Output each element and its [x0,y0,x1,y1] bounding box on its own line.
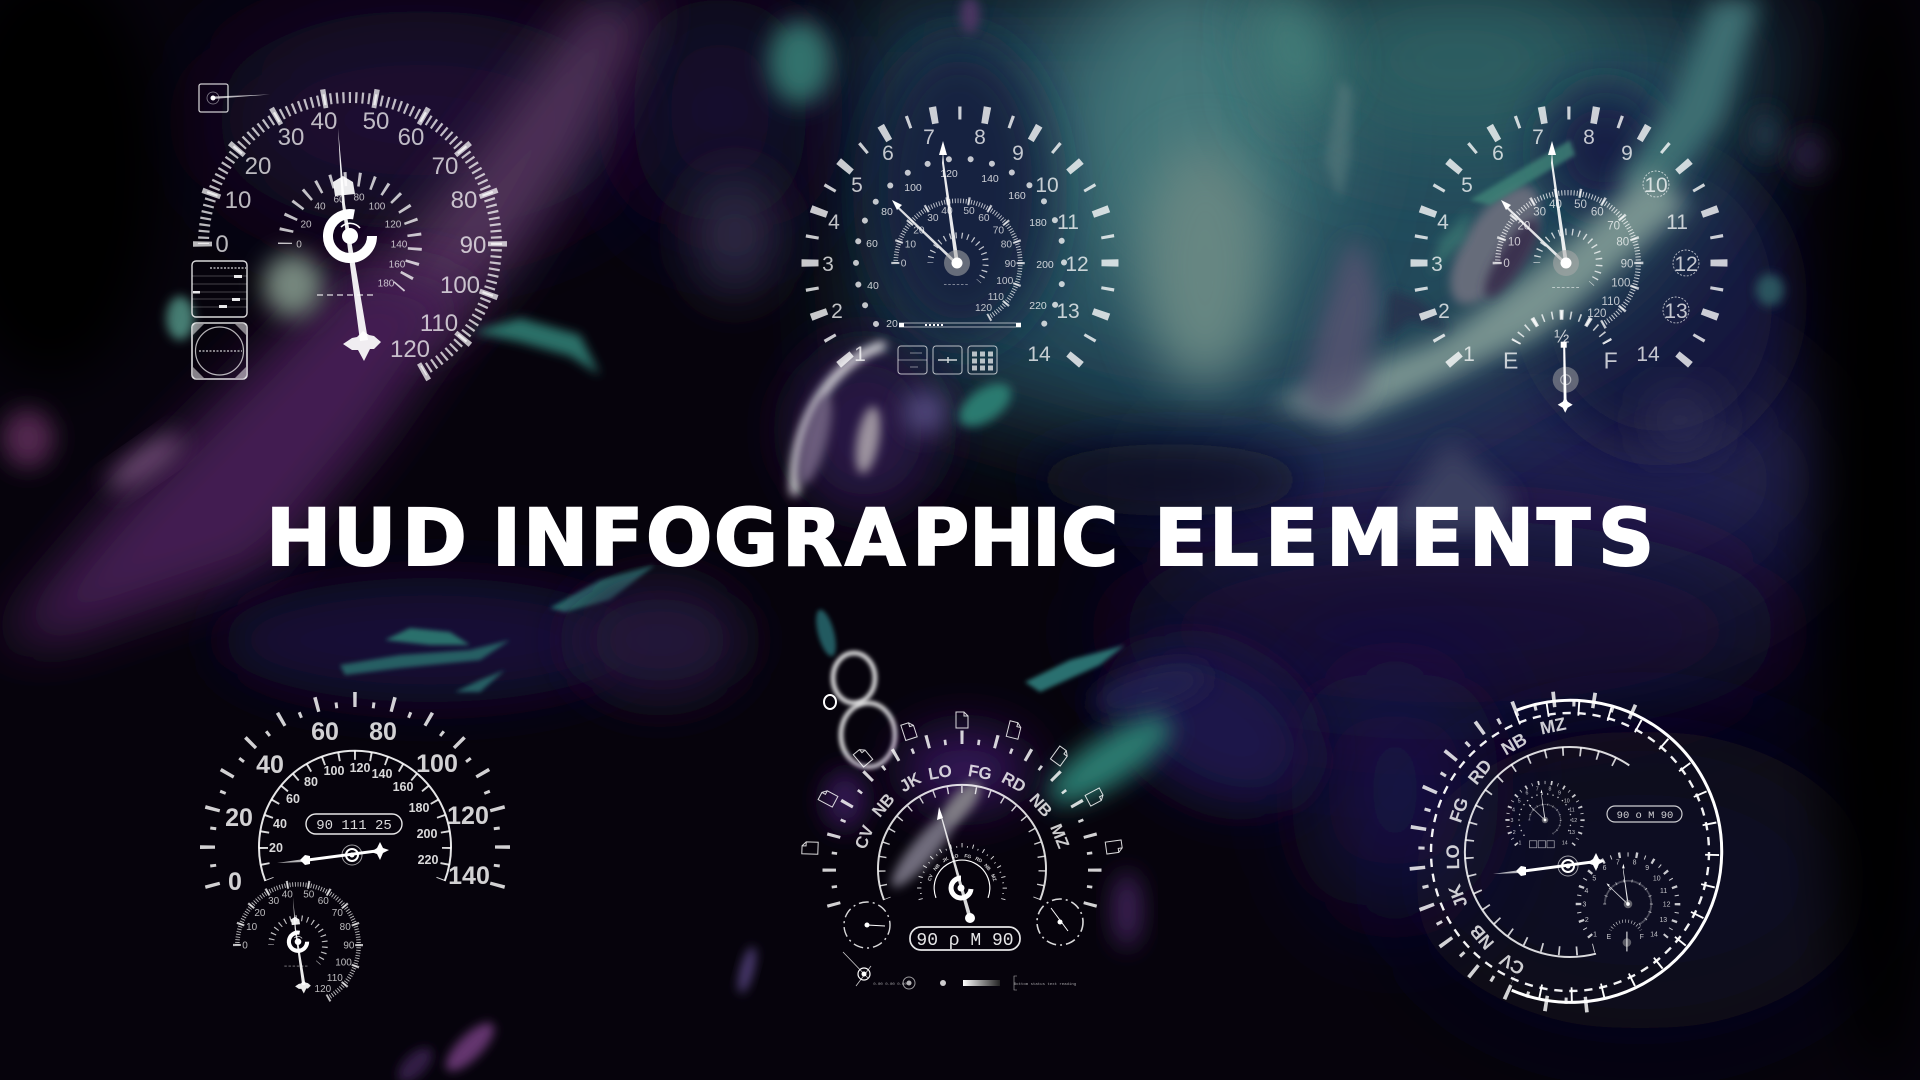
dotted ring labels: 180 [1029,217,1047,229]
dotted ring [856,159,1064,324]
inner mini speedometer: 10 [905,240,916,251]
mini speedometer [237,884,359,998]
mini speedometer: 100 [335,957,352,968]
tach number labels: 5 [1461,174,1473,197]
inner labels: 160 [393,780,413,794]
inner mini speedometer: 30 [927,213,939,224]
outer ring [1512,700,1722,1002]
title: HUD INFOGRAPHIC ELEMENTS [266,494,1654,584]
inner mini speedometer: 30 [1533,206,1546,218]
rotated zone labels: LO [1443,844,1463,870]
inner arc [878,785,1046,900]
mini speedometer: 50 [303,889,315,900]
inner scale labels: 0 [296,240,302,250]
mini speedometer: 20 [254,908,266,919]
tach number labels: 13 [1056,300,1080,323]
inner labels: 200 [417,827,437,841]
mini tach gauge: 14 [1562,840,1568,846]
mini tach gauge: 4 [1512,808,1515,814]
inner labels: 60 [286,792,300,806]
dotted ring labels: 200 [1036,259,1054,271]
readout pill [306,814,402,834]
outer bold labels: 60 [311,718,339,746]
tach number labels: 12 [1065,253,1089,276]
mini zone dial: CV [927,873,935,882]
mini zone dial: LO [951,853,959,860]
panel: round dial [192,323,247,379]
inner mini speedometer: 60 [978,213,990,224]
readout pill [1607,806,1682,822]
outer bold labels: 20 [225,804,253,832]
rotated zone labels: JK [1445,882,1471,910]
inner labels: 80 [304,775,318,789]
inner scale labels: 20 [300,220,312,230]
gauge: bottom-left speedometer [207,699,502,998]
inner scale labels: 40 [314,202,326,212]
tach number labels: 1 [854,343,866,366]
speed scale labels: 50 [363,108,389,135]
gauge: bottom-right composite ring [1394,676,1722,1010]
icon: three small panels [898,346,997,374]
mini zone dial: FG [964,853,972,860]
readout pill: 90 o M 90 [1617,810,1673,822]
mini zone dial: NB [932,863,942,872]
mini tach gauge: 10 [1564,798,1570,804]
inner mini speedometer: 10 [1508,237,1521,249]
inner labels: 100 [324,764,344,778]
rotated zone labels: MZ [1538,714,1568,738]
inner scale labels: 180 [378,278,395,290]
outer bold labels: 120 [447,802,489,830]
small right dial [1037,899,1083,945]
mini tach gauge: 8 [1549,786,1552,792]
inner mini speedometer [1497,192,1639,325]
inner mini speedometer: 0 [1503,258,1510,270]
mini fuel gauge: 2 [1585,917,1589,924]
mini speedometer: 40 [282,889,293,900]
tach number labels: 10 [1035,174,1059,197]
inner mini speedometer: 0 [901,258,907,269]
notched ring [1431,708,1712,994]
mini zone dial: RD [974,856,983,865]
speed scale labels: 80 [451,187,477,214]
document icons [802,712,1123,854]
dotted ring labels: 140 [981,173,999,185]
inner scale labels: 140 [391,240,408,250]
speed scale labels: 90 [460,232,486,259]
mini tach gauge: 2 [1513,830,1516,836]
inner scale labels [296,192,408,290]
fuel gauge: F [1604,348,1618,374]
tach number labels: 14 [1027,343,1051,366]
tach number labels: 11 [1057,211,1079,234]
inner mini speedometer: 60 [1591,206,1604,218]
rotated zone labels: NB [868,790,899,821]
inner labels: 220 [418,853,438,867]
inner scale labels: 120 [385,220,402,230]
mini zone dial: MZ [989,873,997,882]
inner scale labels: 80 [353,192,365,204]
speed scale labels: 60 [398,124,424,151]
mini fuel gauge [1578,854,1678,951]
inner mini speedometer: 80 [1001,240,1012,251]
tach number labels: 2 [831,300,843,323]
inner mini speedometer: 70 [1607,220,1620,232]
outer bold labels: 80 [369,718,397,746]
tach number labels: 5 [851,174,863,197]
dotted ring labels: 220 [1029,300,1047,312]
tach number labels: 11 [1666,211,1688,234]
mini zone dial [919,845,1005,900]
mini speedometer: 110 [327,973,343,984]
dotted ring labels [866,168,1054,330]
mini fuel gauge: E [1606,934,1611,941]
mini speedometer: 30 [268,896,280,907]
needle [277,842,389,865]
inner arc [1465,747,1629,957]
inner mini speedometer: 110 [988,292,1004,303]
tach number labels: 9 [1012,142,1024,165]
tach number labels [822,126,1089,366]
speed scale labels [215,108,486,363]
gauge: top-left speedometer [192,84,497,379]
tach number labels: 9 [1621,142,1633,165]
mini fuel gauge: 13 [1659,917,1667,924]
mini zone dial: NB [982,863,992,873]
inner mini speedometer: 120 [1587,308,1606,320]
needles and hub [892,141,970,276]
tach number labels [1431,126,1698,366]
inner mini speedometer: 90 [1005,259,1016,270]
gauge: top-right speedometer with fuel [1419,113,1719,413]
rotated zone labels: LO [927,761,953,784]
tach number labels: 3 [1431,253,1443,276]
needle [1493,853,1605,876]
inner mini speedometer: 40 [941,206,953,217]
inner mini speedometer: 40 [1549,199,1562,211]
speed scale labels: 0 [215,231,229,258]
rotated zone labels: MZ [1046,821,1073,851]
mini tach gauge: 3 [1511,818,1514,824]
tach number labels: 4 [1437,211,1449,234]
tach number labels: 14 [1636,343,1660,366]
mini speedometer: 70 [332,908,343,919]
inner mini speedometer: 110 [1602,296,1620,308]
speed scale labels: 110 [420,310,458,337]
speed scale labels: 10 [225,187,251,214]
mini tach gauge [1508,782,1582,848]
mini fuel gauge: 4 [1584,888,1588,895]
gauge: top-centre dual speedometer [810,113,1110,374]
inner mini speedometer: 100 [1611,278,1630,290]
rotated zone labels [1443,714,1568,979]
tach number labels: 1 [1463,343,1475,366]
tach number labels: 4 [828,211,840,234]
tach number labels: 8 [1583,126,1595,149]
inner scale labels: 100 [369,202,386,212]
rotated zone labels: FG [967,761,993,784]
tach number labels: 7 [923,126,935,149]
tach number labels: 12 [1674,253,1698,276]
mini fuel gauge: 14 [1650,931,1658,938]
outer bold labels: 0 [228,868,242,896]
outer bold labels: 140 [448,862,490,890]
status strip: 0.00 0.00 0.00 [873,983,907,987]
mini speedometer: 60 [318,896,329,907]
dotted ring labels: 120 [940,168,958,180]
fuel gauge [1503,315,1618,413]
mini speedometer: 120 [315,984,332,995]
speed scale labels: 30 [278,124,304,151]
inner scale labels: 60 [333,194,345,206]
rotated zone labels: JK [896,768,925,796]
mini zone dial: JK [941,856,950,864]
tach number labels: 13 [1664,300,1688,323]
dashed rings around 10 12 13 [1643,171,1699,323]
speed scale labels: 100 [440,272,480,299]
dotted ring labels: 40 [867,280,879,292]
tach number labels: 6 [882,142,894,165]
tach number labels: 6 [1492,142,1504,165]
inner mini speedometer: 80 [1616,237,1629,249]
mini speedometer: 90 [343,941,355,952]
inner labels: 120 [350,761,370,775]
rotated zone labels: RD [998,768,1029,797]
readout pill: 90 111 25 [316,818,392,834]
tach number labels: 8 [974,126,986,149]
speed scale labels: 120 [390,336,430,363]
inner labels: 20 [269,841,283,855]
mini tach gauge: 12 [1571,818,1577,824]
speed scale labels: 40 [311,108,337,135]
mini fuel gauge: 10 [1653,876,1661,883]
fuel gauge: E [1503,348,1518,374]
needle and hub [328,128,381,361]
rotated zone labels: NB [1498,729,1530,759]
inner labels: 40 [273,817,287,831]
status strip [843,952,1077,990]
mini tach gauge: 11 [1569,808,1575,814]
inner mini speedometer: 70 [993,225,1004,236]
small left dial [844,902,890,948]
mini fuel gauge: 8 [1633,860,1637,867]
speed scale labels: 20 [245,153,271,180]
inner mini speedometer: 20 [1517,220,1530,232]
inner mini speedometer: 100 [996,276,1014,287]
tach number labels: 2 [1438,300,1450,323]
mini fuel gauge: 5 [1592,876,1596,883]
mini speedometer: 0 [242,940,248,951]
mini fuel gauge: 6 [1603,865,1607,872]
dotted ring labels: 80 [881,206,893,218]
mini fuel gauge: 7 [1616,860,1620,867]
outer bold labels: 100 [416,750,458,778]
mini tach gauge: 7 [1536,786,1539,792]
inner mini speedometer: 50 [1574,199,1587,211]
inner mini speedometer [895,200,1021,318]
dotted ring labels: 160 [1008,190,1026,202]
tach number labels: 10 [1644,174,1668,197]
inner mini speedometer: 20 [913,225,925,236]
inner labels: 180 [409,801,429,815]
inner mini speedometer: 50 [963,206,975,217]
mini fuel gauge: 3 [1583,902,1587,909]
readout pill: 90 ρ M 90 [916,931,1014,951]
needle and hub [937,807,975,923]
icon: target square [199,84,270,112]
rotated zone labels: CV [851,822,878,852]
mini tach gauge: 13 [1569,830,1575,836]
dotted ring labels: 100 [904,182,922,194]
rotated zone labels: CV [1496,949,1528,979]
rotated zone labels: NB [1025,790,1056,821]
mini tach gauge: 1 [1519,840,1522,846]
inner scale labels: 160 [389,260,406,270]
mini fuel gauge: 9 [1645,865,1649,872]
gauge: bottom-centre zone dial [802,712,1123,990]
mini fuel gauge: 12 [1663,902,1671,909]
mini fuel gauge: F [1640,934,1644,941]
rotated zone labels [851,761,1073,852]
dotted ring labels: 60 [866,238,878,250]
mini speedometer: 80 [340,922,351,933]
inner labels [269,761,438,867]
rotated zone labels: RD [1464,756,1496,788]
outer bold labels: 40 [256,751,284,779]
mini fuel gauge: 11 [1660,888,1667,895]
inner labels: 140 [372,767,392,781]
panel: readout bars [192,261,247,317]
inner arc [259,751,451,881]
outer ticks [1394,676,1635,1010]
dotted ring labels: 20 [886,318,898,330]
tach number labels: 7 [1532,126,1544,149]
progress bar [899,323,1021,327]
status strip: Bottom status text reading [1014,982,1077,987]
fuel gauge: ½ [1554,327,1569,347]
rotated zone labels: FG [1445,795,1473,825]
rotated zone labels: NB [1466,921,1498,953]
needles and hub [1501,141,1579,276]
inner mini speedometer: 120 [975,303,992,314]
mini tach gauge: 9 [1558,790,1561,796]
mini speedometer: 10 [246,922,258,933]
outer bold labels [225,718,490,896]
mini fuel gauge: 1 [1593,931,1597,938]
speed scale labels: 70 [432,153,458,180]
inner mini speedometer: 90 [1621,258,1633,270]
tach number labels: 3 [822,253,834,276]
mini tach gauge: 5 [1518,798,1521,804]
mini tach gauge: 6 [1526,790,1529,796]
